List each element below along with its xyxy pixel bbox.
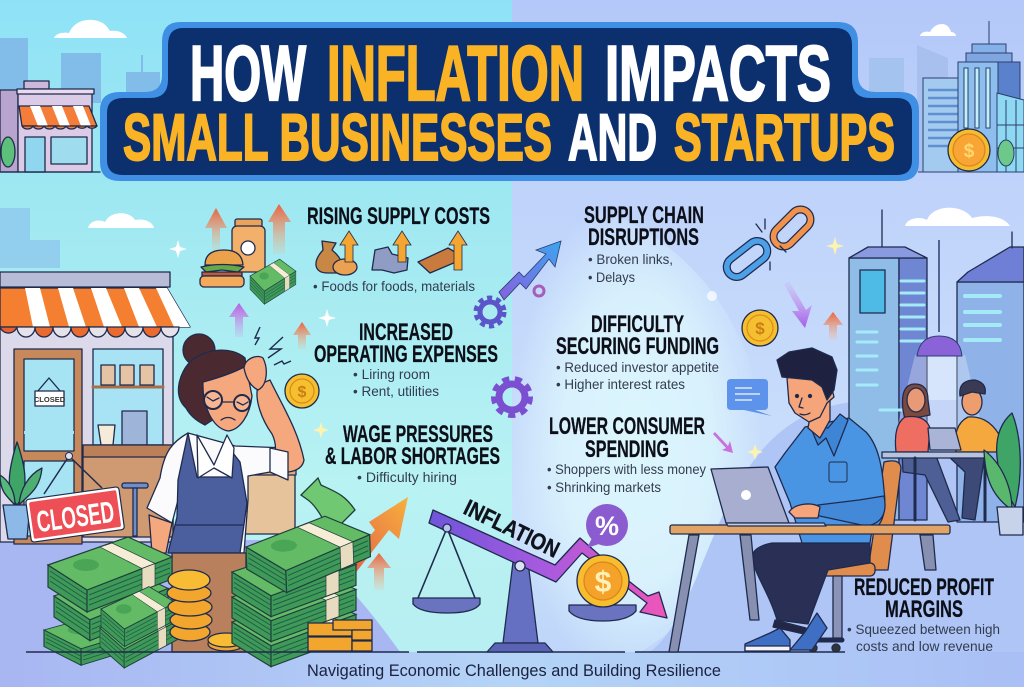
shop door	[14, 349, 82, 544]
raised arm	[257, 380, 304, 472]
icon: jar	[232, 219, 265, 272]
title line 2: AND	[568, 100, 657, 174]
text: lower consumer spending: LOWER CONSUMER	[549, 413, 705, 440]
seated woman	[895, 384, 960, 522]
title line 1: HOW	[190, 29, 306, 117]
text: reduced profit margins: MARGINS	[885, 596, 963, 623]
arrow: silver	[393, 231, 411, 262]
inflation label: INFLATION	[460, 494, 564, 563]
right half glow	[512, 193, 762, 687]
text: supply chain: • Delays	[588, 269, 635, 285]
desk	[669, 525, 950, 652]
storefront top left	[0, 81, 100, 172]
shirt	[775, 418, 885, 543]
money stack right	[232, 478, 372, 667]
icon: cash	[250, 259, 296, 304]
coin left	[285, 374, 319, 408]
sparkles	[169, 237, 844, 460]
table	[882, 452, 988, 458]
text: lower consumer spending: • Shrinking markets	[547, 479, 661, 495]
text: rising supply costs: RISING SUPPLY COSTS	[307, 203, 490, 230]
coin top right: $	[964, 141, 975, 162]
text: wage pressures	[325, 421, 500, 485]
title banner	[100, 22, 919, 181]
orange trend arrow	[348, 497, 408, 575]
wooden desk behind money	[172, 553, 246, 652]
text: increased operating expenses: INCREASED	[359, 319, 453, 346]
title line 2: SMALL BUSINESSES	[123, 100, 552, 174]
blouse	[147, 433, 288, 553]
closed sign	[26, 452, 125, 542]
title line 2: STARTUPS	[674, 100, 895, 174]
laptop bg	[928, 428, 961, 450]
hair	[777, 348, 837, 400]
man	[745, 348, 885, 651]
text: increased operating expenses: • Liring room	[353, 366, 430, 382]
text: wage pressures: • Difficulty hiring	[357, 469, 457, 485]
skyline top left	[0, 38, 160, 103]
text: lower consumer spending: • Shoppers with less money	[547, 461, 706, 477]
scale pivots	[443, 524, 525, 571]
pink small arrow	[713, 432, 733, 453]
coin right: $	[755, 319, 765, 338]
text: securing funding: • Reduced investor appetite	[556, 359, 719, 375]
cloud top left	[54, 20, 127, 38]
chair	[790, 461, 901, 652]
laptop	[711, 467, 826, 526]
arrow: wood	[449, 231, 467, 270]
text: supply chain: DISRUPTIONS	[588, 224, 699, 251]
coin on scale	[577, 555, 629, 607]
purple down arrow	[784, 281, 812, 328]
background right half	[512, 0, 1024, 687]
text: securing funding: DIFFICULTY	[591, 311, 684, 338]
plant left	[0, 442, 42, 539]
coin right	[742, 310, 778, 346]
text: lower consumer spending: SPENDING	[585, 436, 669, 463]
gear top	[476, 298, 504, 326]
title line 1: IMPACTS	[605, 29, 831, 117]
beige counter	[240, 470, 296, 534]
closed sign: CLOSED	[35, 496, 116, 539]
shop window	[93, 349, 163, 445]
icon: burger	[200, 250, 244, 287]
apron	[168, 433, 247, 553]
scale	[413, 528, 636, 652]
plant right	[984, 413, 1023, 535]
red arrows	[205, 208, 227, 250]
text: reduced profit margins	[847, 574, 1000, 654]
text: increased operating expenses: OPERATING EXPENSES	[314, 341, 498, 368]
coin top right	[948, 129, 990, 171]
hands	[789, 504, 820, 518]
stool	[122, 483, 148, 536]
coins small	[308, 620, 372, 651]
shop door: CLOSED	[34, 395, 66, 404]
arrow: bag	[340, 231, 358, 262]
coin left: $	[298, 384, 307, 401]
gear small	[534, 286, 544, 296]
title line 1: INFLATION	[327, 29, 584, 117]
background left half	[0, 0, 512, 687]
buildings right	[849, 210, 1024, 522]
flying banknote	[301, 478, 355, 535]
seated man	[945, 380, 1002, 520]
icon: wood planks	[418, 248, 456, 273]
percent bubble: %	[595, 511, 619, 541]
skyline left middle	[0, 208, 60, 268]
skyline top right	[869, 21, 1024, 172]
cloud right middle	[905, 208, 1010, 226]
purple up arrow	[229, 303, 249, 337]
rising costs icons	[200, 204, 296, 304]
blue rising arrow	[499, 241, 561, 300]
orange up arrow right	[823, 312, 843, 340]
text: increased operating expenses	[314, 319, 498, 399]
percent bubble	[586, 504, 628, 548]
ground strip	[0, 652, 1024, 687]
text: securing funding: • Higher interest rates	[556, 376, 685, 392]
text: wage pressures: & LABOR SHORTAGES	[325, 443, 500, 470]
shop left	[0, 272, 190, 544]
text: supply chain: SUPPLY CHAIN	[584, 202, 704, 229]
title line 1	[190, 29, 831, 117]
left forearm	[149, 515, 172, 553]
text: wage pressures: WAGE PRESSURES	[343, 421, 493, 448]
ground left	[0, 540, 400, 652]
text: reduced profit margins: costs and low revenue	[856, 638, 993, 654]
ground right	[650, 400, 1024, 652]
cloud left middle	[88, 213, 154, 228]
icon: broken chain	[723, 205, 815, 281]
text: supply chain: • Broken links,	[588, 251, 673, 267]
money stack left	[44, 537, 177, 668]
legs	[752, 543, 870, 624]
left shoe	[745, 628, 790, 651]
orange up arrow	[293, 322, 311, 349]
icon: money bag	[316, 241, 357, 275]
text: increased operating expenses: • Rent, utilities	[353, 383, 439, 399]
text: lower consumer spending	[547, 413, 706, 495]
text: securing funding: SECURING FUNDING	[556, 333, 719, 360]
icon: silver stack	[372, 247, 408, 273]
text: supply chain	[584, 202, 704, 285]
inflation arrow	[429, 494, 667, 618]
awning	[0, 288, 190, 337]
cloud top right	[920, 24, 956, 36]
coin on scale: $	[595, 566, 612, 599]
chat bubble	[727, 379, 772, 416]
text: securing funding	[556, 311, 719, 392]
right shoe	[790, 613, 827, 650]
hanging lamp	[894, 240, 985, 440]
coin stack	[167, 570, 244, 651]
text: rising supply costs	[307, 203, 490, 294]
text: rising supply costs: • Foods for foods, materials	[313, 278, 475, 294]
stress marks	[255, 327, 291, 365]
forearm	[815, 496, 885, 526]
background people at table	[882, 380, 1002, 522]
ground lines	[26, 651, 845, 653]
small red arrow	[367, 553, 391, 590]
gear centre	[494, 379, 530, 415]
footer caption: Navigating Economic Challenges and Building Resilience	[307, 662, 721, 680]
text: reduced profit margins: • Squeezed between high	[847, 621, 1000, 637]
woman	[147, 334, 304, 553]
neck and face	[808, 400, 830, 438]
